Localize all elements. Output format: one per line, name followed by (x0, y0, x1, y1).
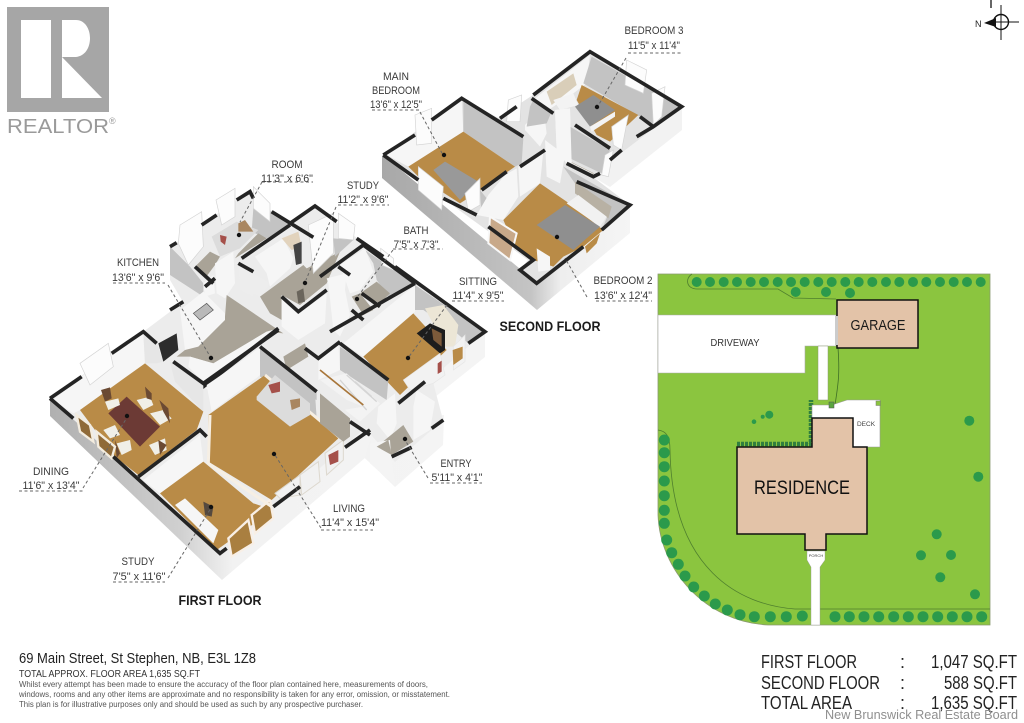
pointer: room (237, 182, 313, 237)
threshold trim (208, 375, 343, 507)
study upper walls (238, 263, 270, 297)
lawn (658, 274, 990, 625)
driveway (658, 315, 836, 373)
label: entry: ENTRY (440, 458, 472, 470)
label: study lower: 7'5" x 11'6" (112, 571, 166, 583)
lower study doors (228, 500, 273, 557)
icon: north compass (975, 0, 1019, 40)
label: room (261, 159, 313, 185)
label: bedroom 2: 13'6" x 12'4" (594, 290, 652, 302)
pointer: main bedroom (372, 110, 446, 157)
living floor (208, 375, 338, 500)
label: study upper: STUDY (347, 180, 380, 192)
area summary table: FIRST FLOOR (761, 652, 857, 672)
bedroom 3 windows and doors (602, 60, 665, 177)
label: entry (432, 458, 483, 484)
study desk and cabinet (255, 232, 302, 287)
label: main bedroom: BEDROOM (372, 85, 420, 97)
label: room: ROOM (272, 159, 302, 171)
pointer: sitting (406, 301, 504, 360)
hall walls (477, 152, 543, 220)
label: main bedroom (370, 71, 422, 111)
partition by bath (327, 273, 350, 337)
label: bedroom 3: BEDROOM 3 (624, 25, 684, 37)
room sofa (212, 220, 258, 257)
bedroom 2 bed (537, 182, 612, 250)
bath window (381, 248, 393, 270)
sitting floor (363, 313, 447, 395)
label: bedroom 3: 11'5" x 11'4" (628, 40, 680, 52)
label: sitting (452, 276, 504, 302)
bedroom 3 closet wall (570, 127, 610, 173)
heading: second floor: SECOND FLOOR (500, 318, 600, 334)
bath floor (352, 282, 390, 315)
label: bath: BATH (404, 225, 429, 237)
room left wall (170, 247, 203, 297)
label: study lower (112, 556, 166, 583)
pointer: kitchen (113, 283, 213, 360)
area summary table: TOTAL AREA (761, 693, 852, 713)
main bedroom windows (415, 108, 480, 212)
sitting doors and furniture (403, 335, 465, 390)
garage (835, 300, 918, 348)
label: living (321, 503, 379, 529)
residence: RESIDENCE (754, 477, 850, 499)
bedroom 2 grey wall (563, 167, 630, 230)
bath sink block (340, 248, 373, 293)
pointer: entry (403, 437, 482, 483)
white partition by room (203, 252, 235, 298)
first floor plan (50, 187, 485, 580)
label: kitchen: KITCHEN (117, 257, 159, 269)
entry (365, 390, 435, 485)
walkway (818, 346, 828, 400)
main bedroom bed (433, 162, 478, 200)
dining and study walls (50, 330, 278, 553)
trees: top row (692, 277, 986, 298)
bedroom 2 doors and window (488, 217, 517, 260)
stairs and railing (320, 370, 380, 422)
label: bath (394, 225, 439, 251)
label: bedroom 2: BEDROOM 2 (594, 275, 652, 287)
pointer: study lower (113, 505, 213, 582)
kitchen side wall (143, 333, 203, 412)
address block: Whilst every attempt has been made to ensure the accuracy of the floor plan contained here, measurements of doors, (19, 680, 428, 689)
pointer: living (272, 452, 373, 530)
address block: This plan is for illustrative purposes only and should be used as such by any prospective purchaser. (19, 700, 363, 709)
label: bedroom 2 (594, 275, 652, 302)
icon: REALTOR logo: REALTOR (7, 115, 109, 138)
living and entry rooms (208, 360, 443, 507)
study upper floor (260, 252, 340, 320)
label: living: LIVING (333, 503, 365, 515)
lower study floor (160, 462, 273, 550)
hall block over bedroom 3 (555, 108, 572, 163)
kitchen floor (177, 295, 283, 363)
label: entry: 5'11" x 4'1" (432, 472, 483, 484)
living furniture and doors (275, 440, 343, 498)
address block: 69 Main Street, St Stephen, NB, E3L 1Z8 (19, 651, 256, 667)
area summary table: SECOND FLOOR (761, 673, 880, 693)
icon: north compass: N (975, 19, 982, 29)
lower walls (273, 382, 443, 507)
label: kitchen (112, 257, 164, 284)
closet fixtures (567, 160, 593, 177)
deck: DECK (857, 421, 876, 428)
label: bath: 7'5" x 7'3" (394, 239, 439, 251)
label: bedroom 3 (624, 25, 684, 52)
dining back wall (53, 333, 145, 413)
label: sitting: 11'4" x 9'5" (452, 290, 504, 302)
sitting walls (415, 285, 483, 343)
area summary table: : (900, 693, 905, 713)
label: dining: 11'6" x 13'4" (22, 480, 80, 492)
chair in study (297, 288, 305, 303)
dining window (80, 343, 113, 385)
hall floor (283, 343, 308, 370)
center rooms: kitchen, room, study, bath, sitting (170, 187, 485, 400)
lower study desk and chair (175, 498, 218, 543)
center walls (170, 192, 485, 392)
bedroom 2 floor (503, 183, 603, 267)
second floor walls (383, 52, 682, 283)
icon: REALTOR logo: ® (109, 116, 116, 126)
block below study (282, 293, 327, 340)
label: study upper (338, 180, 389, 206)
dining and lower study rooms (50, 330, 278, 557)
living back wall (207, 348, 260, 412)
porch and front walk: PORCH (809, 553, 823, 558)
garage: GARAGE (850, 317, 906, 334)
stove (158, 333, 178, 362)
site plan (658, 274, 990, 625)
second floor plan (382, 52, 682, 310)
pointer: dining (19, 414, 129, 491)
exterior walls first floor (50, 332, 485, 580)
pointer: bedroom 2 (555, 235, 652, 301)
room doors and windows (178, 187, 270, 265)
address block: windows, rooms and any other items are approximate and no responsibility is taken for any error, omission, or misstatement. (18, 690, 450, 699)
deck (812, 400, 880, 447)
kitchen island (188, 328, 278, 383)
room grey wall (252, 208, 290, 238)
dining table and chairs (101, 387, 172, 458)
label: kitchen: 13'6" x 9'6" (112, 272, 164, 284)
main bedroom floor (408, 132, 515, 203)
address block (18, 651, 450, 709)
bedroom 3 floor (577, 85, 638, 142)
label: study lower: STUDY (122, 556, 155, 568)
dining floor (80, 363, 203, 475)
area summary table: : (900, 652, 905, 672)
study door and windows (308, 213, 355, 273)
porch and front walk (807, 551, 825, 625)
sitting cabinet and fireplace (417, 305, 458, 353)
hall window (507, 95, 522, 122)
residence (737, 418, 867, 550)
pointer: study upper (303, 205, 389, 285)
area summary table: : (900, 673, 905, 693)
label: dining (22, 466, 80, 492)
living sofa (257, 375, 310, 427)
dining doors (77, 415, 115, 458)
exterior walls second floor (382, 155, 630, 310)
watermark credit: New Brunswick Real Estate Board (825, 708, 1018, 722)
bedroom 3 bed (547, 73, 615, 132)
label: sitting: SITTING (459, 276, 497, 288)
label: study upper: 11'2" x 9'6" (338, 194, 389, 206)
main bedroom walls (387, 100, 463, 167)
room floor (197, 233, 267, 278)
living grey wall (260, 360, 318, 443)
fence line (835, 348, 839, 405)
pointer: bedroom 3 (595, 53, 682, 109)
bedroom 3 back wall (535, 55, 590, 110)
heading: first floor: FIRST FLOOR (178, 592, 262, 608)
bath grey wall (365, 250, 413, 300)
stairwell walls (340, 347, 388, 400)
interior base first floor (50, 192, 485, 555)
garden bed outlines (658, 274, 990, 609)
label: room: 11'3" x 6'6" (261, 173, 313, 185)
interior base second floor (383, 52, 682, 283)
study back wall (143, 435, 203, 493)
hedge beside residence (737, 400, 811, 444)
label: living: 11'4" x 15'4" (321, 517, 379, 529)
label: dining: DINING (33, 466, 69, 478)
stair landing (320, 393, 350, 442)
label: main bedroom: MAIN (383, 71, 409, 83)
label: main bedroom: 13'6" x 12'5" (370, 99, 422, 111)
pointer: bath (355, 249, 443, 301)
area summary table (761, 652, 1017, 713)
trees: left and bottom row (659, 434, 987, 622)
trees: scattered (752, 411, 983, 599)
address block: TOTAL APPROX. FLOOR AREA 1,635 SQ.FT (19, 669, 200, 680)
kitchen counter with sink (180, 292, 225, 350)
driveway: DRIVEWAY (710, 338, 760, 349)
icon: REALTOR logo (7, 7, 116, 138)
